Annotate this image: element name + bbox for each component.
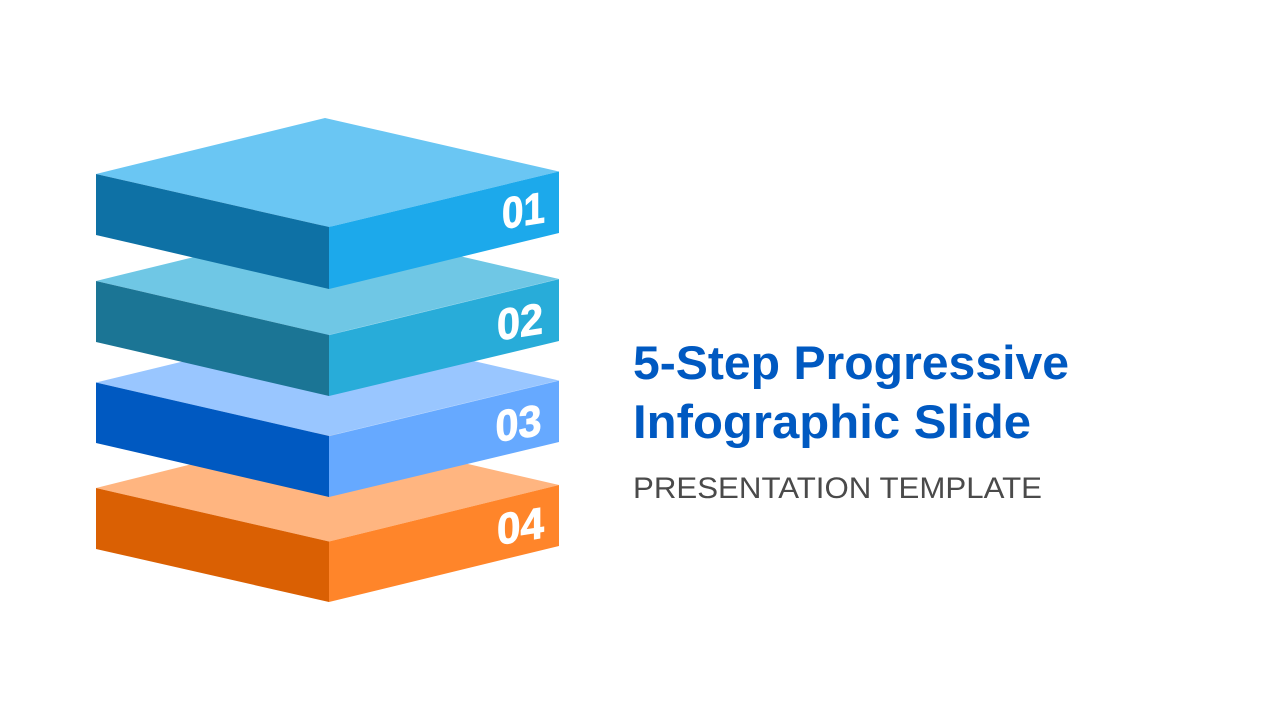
layer 04: orange: [96, 431, 559, 602]
number 03: 03: [496, 396, 542, 452]
layer 02: teal: [96, 225, 559, 396]
title: [633, 336, 1069, 448]
layer 01: light blue: [96, 118, 559, 289]
subtitle: PRESENTATION TEMPLATE: [633, 472, 1042, 505]
number 01: 01: [502, 183, 545, 239]
title: 5-Step Progressive: [633, 336, 1069, 389]
layer 03: blue: [96, 327, 559, 497]
title: Infographic Slide: [633, 395, 1031, 448]
number 04: 04: [497, 499, 544, 555]
number 02: 02: [497, 294, 543, 350]
